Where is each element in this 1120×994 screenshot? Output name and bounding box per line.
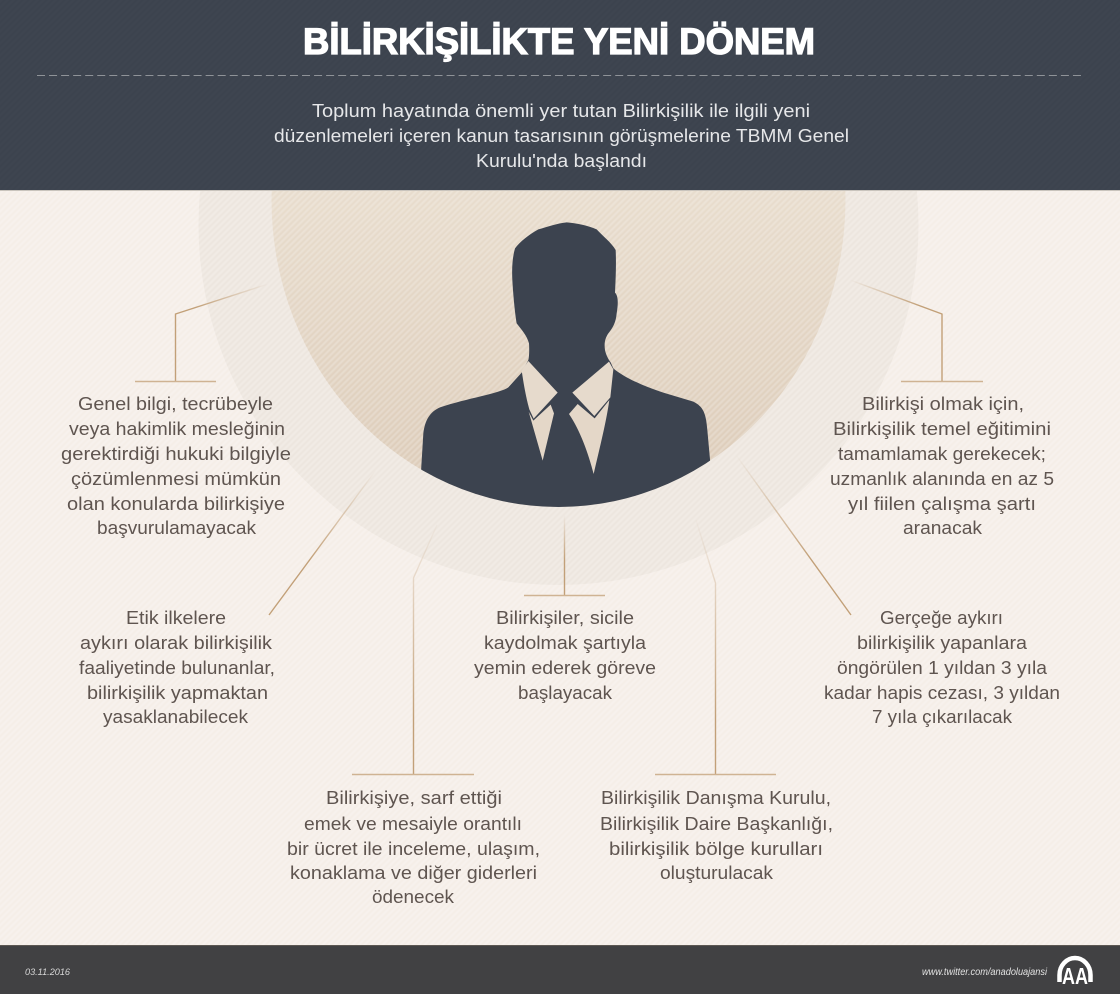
text block: penalty: öngörülen 1 yıldan 3 yıla: [837, 657, 1048, 678]
text block: ethics: bilirkişilik yapmaktan: [87, 682, 268, 703]
text block: payment: konaklama ve diğer giderleri: [290, 862, 537, 883]
text block: ethics: faaliyetinde bulunanlar,: [79, 657, 275, 678]
text block: penalty: Gerçeğe aykırı: [880, 607, 1003, 628]
text block: payment: [287, 787, 540, 907]
text block: general knowledge: Genel bilgi, tecrübeyle: [78, 393, 273, 414]
stripe texture: [0, 191, 1120, 945]
text block: penalty: kadar hapis cezası, 3 yıldan: [824, 682, 1060, 703]
subtitle: düzenlemeleri içeren kanun tasarısının görüşmelerine TBMM Genel: [274, 125, 849, 146]
outer ring circle: [198, 0, 918, 585]
text block: general knowledge: gerektirdiği hukuki bilgiyle: [61, 443, 291, 464]
silhouette of a man in a suit: [421, 222, 711, 533]
connector: top left: [135, 284, 268, 382]
icon: AA logo: AA: [1062, 963, 1088, 989]
text block: payment: Bilirkişiye, sarf ettiği: [326, 787, 502, 808]
text block: registry and oath: yemin ederek göreve: [474, 657, 656, 678]
text block: general knowledge: başvurulamayacak: [97, 517, 257, 538]
text block: penalty: [824, 607, 1060, 727]
text block: payment: emek ve mesaiyle orantılı: [304, 813, 522, 834]
icon: AA logo: [1060, 958, 1090, 989]
text block: training requirement: [830, 393, 1054, 538]
subtitle: Toplum hayatında önemli yer tutan Bilirkişilik ile ilgili yeni: [312, 100, 810, 121]
text block: ethics: Etik ilkelere: [126, 607, 226, 628]
text block: training requirement: tamamlamak gerekecek;: [838, 443, 1046, 464]
text block: registry and oath: başlayacak: [518, 682, 613, 703]
text block: new institutions: Bilirkişilik Daire Başkanlığı,: [600, 813, 833, 834]
inner circle: [272, 0, 846, 507]
text block: training requirement: Bilirkişilik temel eğitimini: [833, 418, 1051, 439]
text block: training requirement: aranacak: [903, 517, 983, 538]
text block: training requirement: Bilirkişi olmak için,: [862, 393, 1024, 414]
text block: new institutions: oluşturulacak: [660, 862, 774, 883]
text block: payment: ödenecek: [372, 886, 455, 907]
text block: ethics: yasaklanabilecek: [103, 706, 249, 727]
title: BİLİRKİŞİLİKTE YENİ DÖNEM: [303, 21, 815, 62]
connector: middle left: [269, 470, 376, 615]
text block: new institutions: Bilirkişilik Danışma Kurulu,: [601, 787, 831, 808]
text block: general knowledge: veya hakimlik mesleğinin: [69, 418, 285, 439]
text block: general knowledge: [61, 393, 291, 538]
text block: training requirement: uzmanlık alanında en az 5: [830, 468, 1054, 489]
text block: general knowledge: çözümlenmesi mümkün: [71, 468, 281, 489]
header band: [0, 0, 1120, 191]
footer social link: www.twitter.com/anadoluajansi: [922, 967, 1048, 978]
text block: penalty: 7 yıla çıkarılacak: [872, 706, 1013, 727]
connector: centre: [524, 515, 605, 596]
connector: bottom left: [352, 525, 474, 775]
text block: ethics: [79, 607, 275, 727]
text block: registry and oath: kaydolmak şartıyla: [484, 632, 647, 653]
connector: middle right: [736, 455, 851, 615]
text block: general knowledge: olan konularda bilirkişiye: [67, 493, 285, 514]
footer date: 03.11.2016: [25, 967, 71, 978]
text block: registry and oath: [474, 607, 656, 703]
text block: payment: bir ücret ile inceleme, ulaşım,: [287, 838, 540, 859]
text block: penalty: bilirkişilik yapanlara: [857, 632, 1028, 653]
text block: new institutions: bilirkişilik bölge kurulları: [609, 838, 823, 859]
connector: top right: [850, 280, 983, 382]
footer band: [0, 945, 1120, 994]
dashed divider: [37, 74, 1081, 76]
text block: registry and oath: Bilirkişiler, sicile: [496, 607, 634, 628]
text block: ethics: aykırı olarak bilirkişilik: [80, 632, 273, 653]
text block: training requirement: yıl fiilen çalışma şartı: [848, 493, 1036, 514]
connector: bottom right: [655, 520, 776, 775]
subtitle: Kurulu'nda başlandı: [476, 150, 647, 171]
text block: new institutions: [600, 787, 833, 883]
subtitle: [274, 100, 849, 171]
